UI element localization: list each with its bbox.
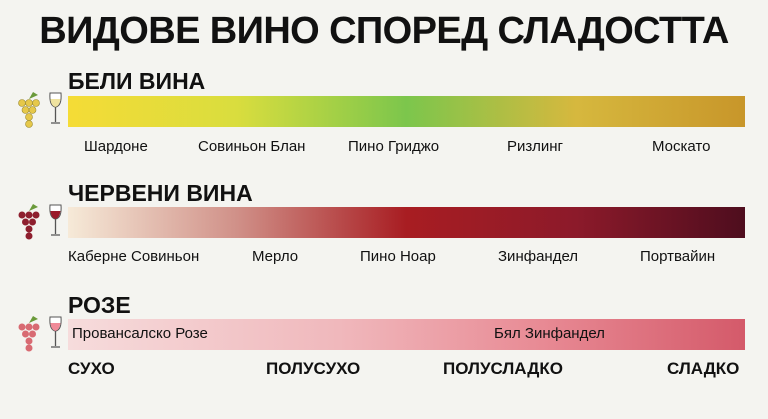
bar: red gradient — [68, 207, 745, 238]
labels: red wines: Портвайин — [640, 248, 715, 265]
title: ВИДОВЕ ВИНО СПОРЕД СЛАДОСТТА — [39, 10, 729, 52]
icon: white grapes and glass — [18, 92, 62, 128]
labels: red wines: Пино Ноар — [360, 248, 436, 265]
scale labels: ПОЛУСУХО — [266, 359, 360, 378]
heading: rose: РОЗЕ — [68, 292, 131, 318]
scale labels: СЛАДКО — [667, 359, 739, 378]
labels: white wines: Шардоне — [84, 138, 148, 155]
bar: white gradient — [68, 96, 745, 127]
labels: white wines: Совиньон Блан — [198, 138, 305, 155]
heading: white wines: БЕЛИ ВИНА — [68, 68, 205, 94]
labels: white wines: Ризлинг — [507, 138, 563, 155]
icon: rose grapes and glass — [18, 316, 62, 352]
bar: rose gradient with labels: Бял Зинфандел — [494, 325, 605, 342]
labels: white wines: Москато — [652, 138, 710, 155]
scale labels: СУХО — [68, 359, 115, 378]
heading: red wines: ЧЕРВЕНИ ВИНА — [68, 180, 253, 206]
icon: red grapes and glass — [18, 204, 62, 240]
bar: rose gradient with labels — [68, 319, 745, 350]
labels: red wines — [68, 248, 715, 265]
labels: red wines: Мерло — [252, 248, 298, 265]
labels: red wines: Зинфандел — [498, 248, 578, 265]
labels: white wines — [84, 138, 710, 155]
bar: rose gradient with labels: Провансалско Розе — [72, 325, 208, 342]
labels: white wines: Пино Гриджо — [348, 138, 439, 155]
scale labels: ПОЛУСЛАДКО — [443, 359, 563, 378]
labels: red wines: Каберне Совиньон — [68, 248, 199, 265]
